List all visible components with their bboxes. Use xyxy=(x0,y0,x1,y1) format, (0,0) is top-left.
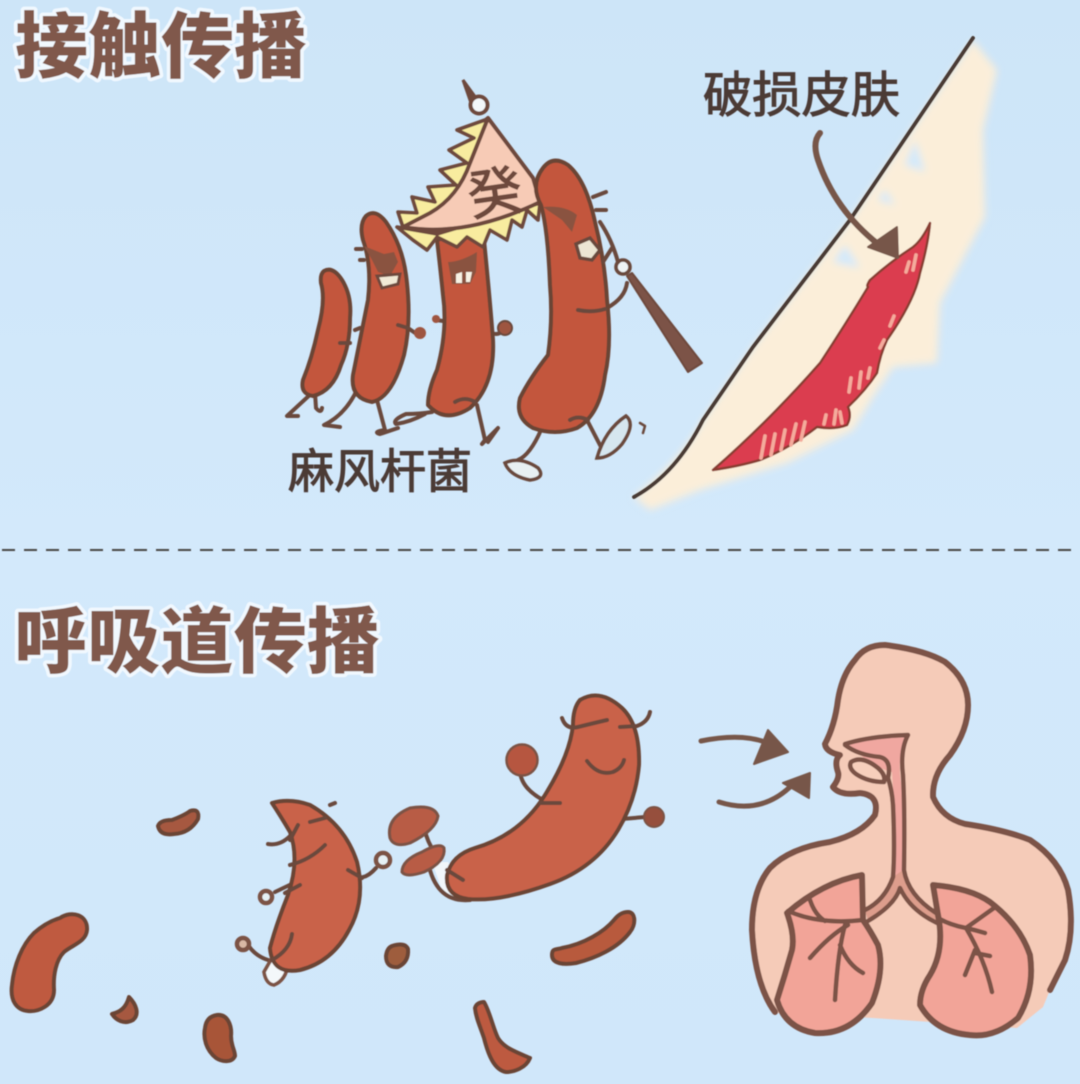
illustration: large running bacterium xyxy=(389,696,664,900)
dashed divider xyxy=(2,549,1080,551)
illustration: human respiratory system xyxy=(752,645,1071,1035)
illustration: curved bacterium xyxy=(237,801,390,985)
right lung xyxy=(920,885,1031,1035)
illustration: skin surface xyxy=(634,38,997,510)
illustration: small bacterium fragments xyxy=(12,810,634,1072)
label: broken skin: 破损皮肤 xyxy=(703,69,900,123)
arrow: air flow lower xyxy=(719,773,810,806)
arrow: air flow upper xyxy=(701,730,788,764)
title: contact transmission: 接触传播 xyxy=(15,8,307,88)
airway xyxy=(845,735,908,880)
illustration: bacterium 2 xyxy=(324,213,426,434)
arrow: to broken skin xyxy=(815,133,898,258)
illustration: wound xyxy=(713,223,930,470)
illustration: pole xyxy=(627,273,702,372)
left lung xyxy=(777,875,880,1033)
body silhouette xyxy=(752,645,1071,1028)
illustration: bacterium 3 xyxy=(395,236,512,444)
illustration: bacterium 4 (flag bearer) xyxy=(505,161,645,480)
title: respiratory transmission: 呼吸道传播 xyxy=(14,603,380,683)
label: mycobacterium leprae: 麻风杆菌 xyxy=(288,445,472,498)
illustration: flag xyxy=(397,80,540,250)
illustration: bacterium 1 xyxy=(287,270,350,416)
flag character: 癸 xyxy=(464,161,526,227)
